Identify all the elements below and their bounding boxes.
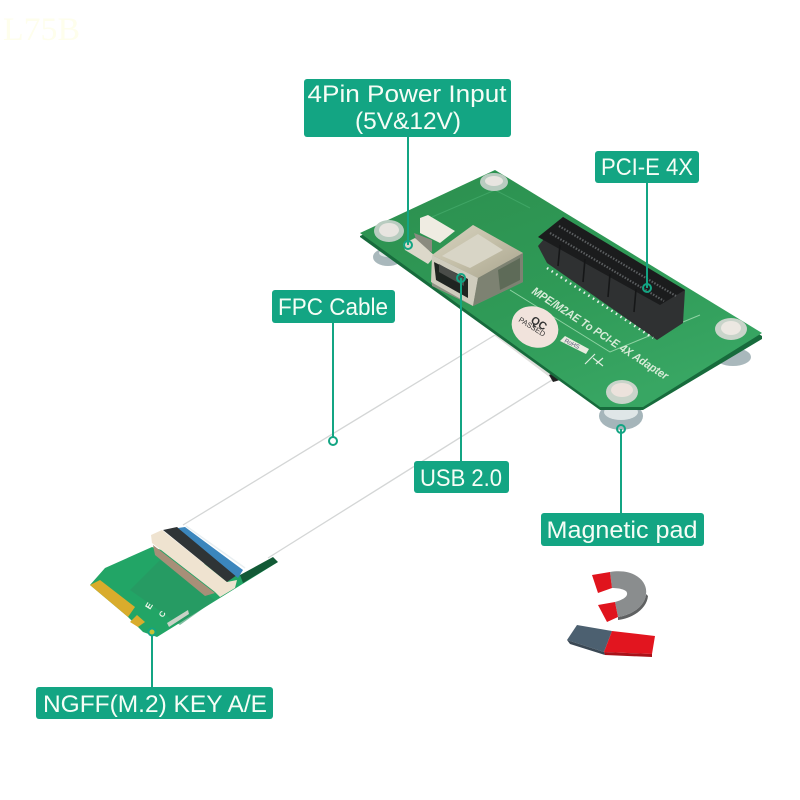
RoHS label	[560, 336, 603, 366]
callout: 4Pin Power Input: (5V&12V)	[355, 108, 461, 135]
callout: FPC Cable	[272, 290, 395, 445]
callout: USB 2.0	[414, 274, 509, 493]
callout: NGFF(M.2) KEY A/E	[36, 628, 273, 719]
bar magnet	[567, 625, 655, 657]
magnet icons	[567, 571, 655, 657]
M.2 board	[90, 526, 278, 637]
horseshoe magnet	[592, 571, 648, 622]
board text: MPE/M2AE To PCI-E 4X Adapter	[529, 285, 670, 383]
flat cable	[183, 325, 560, 558]
QC passed sticker: PASSED	[517, 315, 548, 339]
4 pin power connector	[403, 215, 455, 264]
QC passed sticker: QC	[528, 314, 549, 333]
circuit board	[360, 173, 762, 410]
M.2 board: C	[157, 609, 168, 619]
magnetic feet	[373, 248, 751, 430]
screws	[374, 173, 747, 404]
callout: USB 2.0: USB 2.0	[420, 465, 502, 492]
callout: 4Pin Power Input	[304, 79, 511, 249]
gold fingers	[90, 580, 135, 617]
FPC connector	[151, 526, 245, 597]
callout: PCI-E 4X	[595, 151, 699, 292]
USB 2.0 connector	[431, 225, 523, 306]
RoHS label: RoHS	[563, 338, 580, 351]
callout: NGFF(M.2) KEY A/E: NGFF(M.2) KEY A/E	[43, 691, 267, 718]
callout: Magnetic pad: Magnetic pad	[546, 517, 698, 544]
PCI-E 4X slot	[538, 217, 685, 340]
watermark: L75B	[3, 12, 80, 48]
callout: FPC Cable: FPC Cable	[278, 294, 388, 321]
callout: PCI-E 4X: PCI-E 4X	[601, 154, 693, 181]
QC passed sticker	[505, 299, 565, 355]
silkscreen marks: E	[143, 601, 155, 611]
callout: 4Pin Power Input: 4Pin Power Input	[308, 81, 507, 108]
board base	[90, 547, 278, 637]
callout: Magnetic pad	[541, 425, 704, 546]
side tail	[240, 557, 278, 583]
adapter board	[360, 170, 762, 430]
